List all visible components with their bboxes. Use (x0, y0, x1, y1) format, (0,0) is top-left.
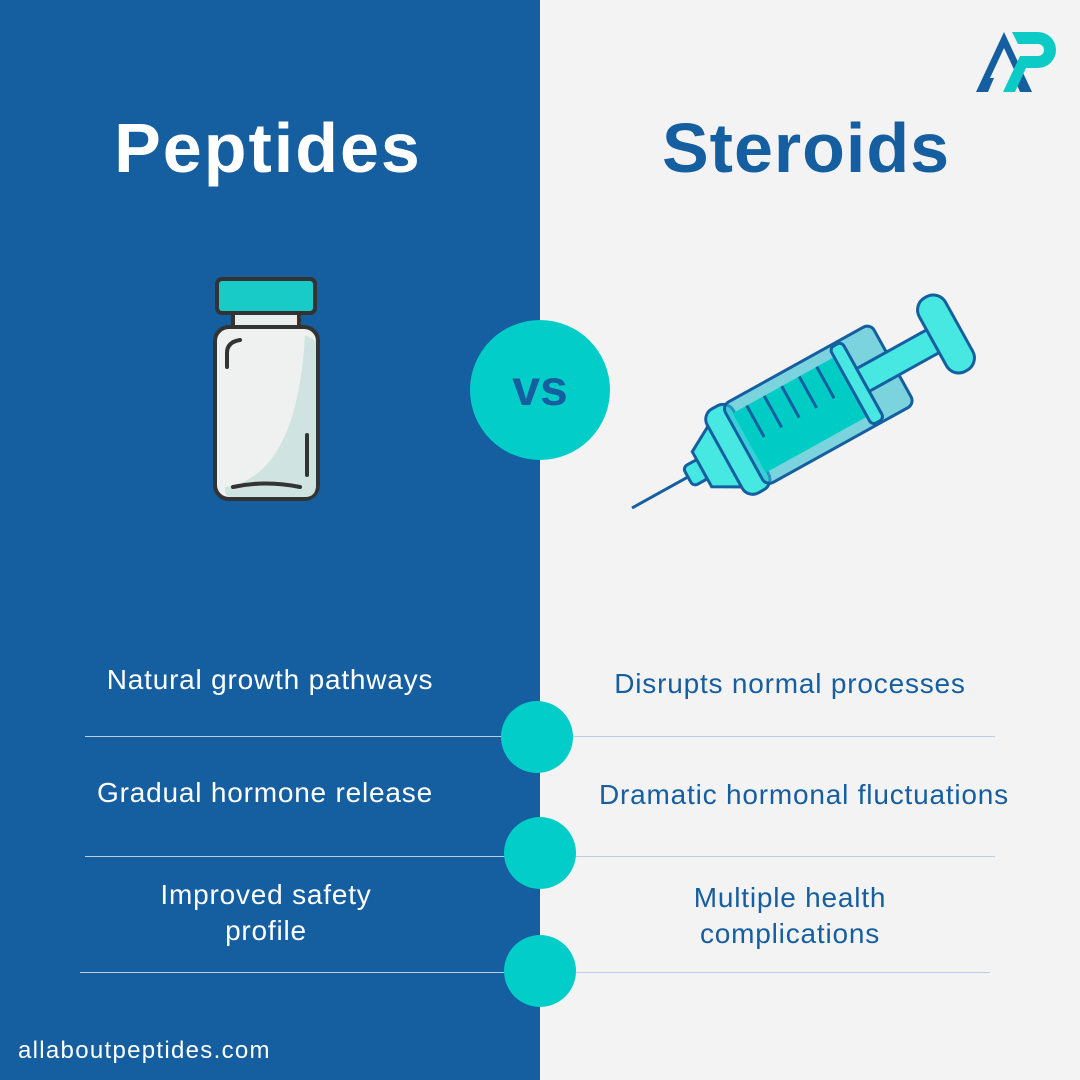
badge: vs (470, 320, 610, 460)
footer url: allaboutpeptides.com (18, 1037, 271, 1064)
divider lines (85, 736, 995, 737)
panel: left peptides background (0, 0, 540, 1080)
row 1 left text: Natural growth pathways (107, 664, 433, 695)
icon: vial (213, 277, 320, 501)
logo: AP (976, 32, 1056, 92)
dot 1 (501, 701, 573, 773)
dot 3 (504, 935, 576, 1007)
row 2 right text: Dramatic hormonal fluctuations (599, 779, 1009, 810)
badge: vs: vs (512, 360, 568, 416)
icon: syringe (631, 294, 976, 510)
row 3 right text: Multiple health (694, 882, 886, 913)
row 3 right text (694, 882, 886, 949)
row 3 left text (160, 879, 372, 946)
row 3 left text: Improved safety (160, 879, 372, 910)
row 3 right text: complications (700, 918, 880, 949)
title: Steroids: Steroids (662, 109, 950, 187)
row 1 right text: Disrupts normal processes (614, 668, 966, 699)
title: Peptides: Peptides (114, 109, 422, 187)
row 2 left text: Gradual hormone release (97, 777, 433, 808)
dot 2 (504, 817, 576, 889)
row 3 left text: profile (225, 915, 307, 946)
